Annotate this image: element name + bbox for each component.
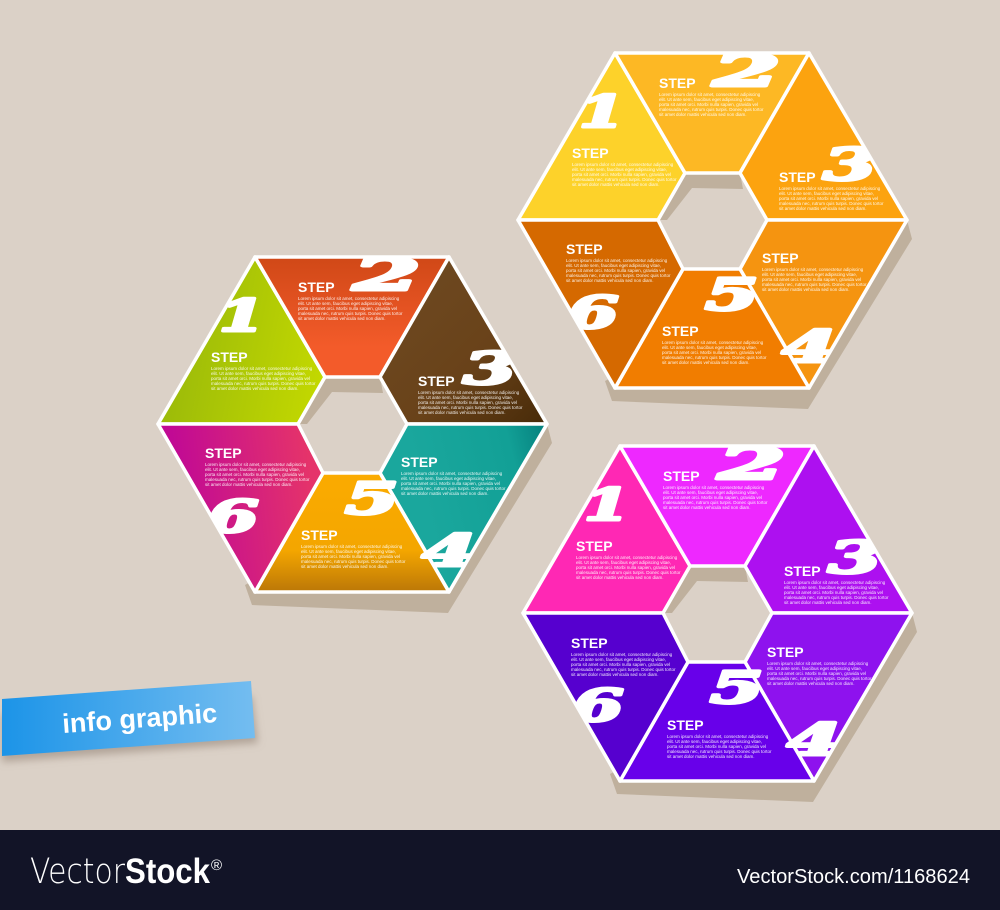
numerals: 6	[573, 681, 624, 732]
step text 2: STEP	[659, 75, 696, 91]
step text 2: STEP	[663, 468, 700, 484]
numerals: 6	[208, 492, 259, 543]
step text 3: elit. Ut ante sem, faucibus eget adipiscing vitae,	[418, 395, 513, 400]
segment 4	[380, 424, 547, 592]
step text 1: Lorem ipsum dolor sit amet, consectetur adipiscing	[211, 366, 313, 371]
step text 1: elit. Ut ante sem, faucibus eget adipiscing vitae,	[572, 167, 667, 172]
step text 3: sit amet dolor mattis vehicula sed non diam.	[779, 206, 867, 211]
step text 2	[298, 279, 403, 321]
footer bar: VectorStock.com/1168624	[737, 866, 970, 888]
segment 3	[745, 446, 912, 613]
numerals: 1	[584, 479, 630, 531]
step text 5: sit amet dolor mattis vehicula sed non diam.	[301, 564, 389, 569]
step text 6: malesuada nec, rutrum quis turpis. Donec quis tortor	[566, 273, 671, 278]
step text 1: sit amet dolor mattis vehicula sed non diam.	[576, 575, 664, 580]
step text 5: elit. Ut ante sem, faucibus eget adipiscing vitae,	[667, 739, 762, 744]
step text 3: Lorem ipsum dolor sit amet, consectetur adipiscing	[784, 580, 886, 585]
step text 6: elit. Ut ante sem, faucibus eget adipiscing vitae,	[205, 467, 300, 472]
segment 1	[158, 257, 325, 424]
step text 1	[572, 145, 677, 187]
footer bar	[0, 830, 1000, 910]
step text 3: STEP	[779, 169, 816, 185]
step text 2: Lorem ipsum dolor sit amet, consectetur adipiscing	[659, 92, 761, 97]
step text 1: porta sit amet orci. Morbi nulla sapien, gravida vel	[211, 376, 310, 381]
step text 3: Lorem ipsum dolor sit amet, consectetur adipiscing	[418, 390, 520, 395]
step text 4: porta sit amet orci. Morbi nulla sapien, gravida vel	[762, 277, 861, 282]
step text 3: porta sit amet orci. Morbi nulla sapien, gravida vel	[779, 196, 878, 201]
step text 1: STEP	[576, 538, 613, 554]
numerals: 3	[823, 139, 877, 191]
step text 4: STEP	[767, 644, 804, 660]
step text 5: Lorem ipsum dolor sit amet, consectetur adipiscing	[662, 340, 764, 345]
step text 3	[784, 563, 889, 605]
banner: info graphic	[2, 681, 258, 762]
step text 4: elit. Ut ante sem, faucibus eget adipiscing vitae,	[401, 476, 496, 481]
segment 5	[620, 662, 814, 781]
step text 4: elit. Ut ante sem, faucibus eget adipiscing vitae,	[767, 666, 862, 671]
segment 3	[740, 53, 907, 220]
step text 2: Lorem ipsum dolor sit amet, consectetur adipiscing	[298, 296, 400, 301]
segment 2	[255, 257, 449, 377]
step text 1	[211, 349, 316, 391]
step text 2	[659, 75, 764, 117]
segment 5	[255, 473, 449, 592]
step text 3: Lorem ipsum dolor sit amet, consectetur adipiscing	[779, 186, 881, 191]
step text 1: elit. Ut ante sem, faucibus eget adipiscing vitae,	[211, 371, 306, 376]
step text 1: sit amet dolor mattis vehicula sed non diam.	[572, 182, 660, 187]
numerals: 4	[422, 525, 477, 577]
numerals: 4	[782, 321, 837, 373]
step text 2: sit amet dolor mattis vehicula sed non diam.	[298, 316, 386, 321]
step text 5	[662, 323, 767, 365]
hexagon: multicolor	[158, 248, 552, 613]
step text 4: porta sit amet orci. Morbi nulla sapien, gravida vel	[767, 671, 866, 676]
step text 3: STEP	[418, 373, 455, 389]
footer bar: Vector	[30, 852, 126, 892]
step text 4: STEP	[401, 454, 438, 470]
step text 5: malesuada nec, rutrum quis turpis. Donec quis tortor	[667, 749, 772, 754]
footer bar: Stock	[125, 852, 210, 891]
footer bar: ®	[211, 857, 222, 874]
numerals: 1	[219, 290, 265, 342]
step text 1: malesuada nec, rutrum quis turpis. Donec quis tortor	[211, 381, 316, 386]
step text 6: sit amet dolor mattis vehicula sed non diam.	[205, 482, 293, 487]
step text 2: elit. Ut ante sem, faucibus eget adipiscing vitae,	[663, 490, 758, 495]
numerals: 5	[705, 269, 759, 321]
step text 2: malesuada nec, rutrum quis turpis. Donec quis tortor	[659, 107, 764, 112]
numerals	[568, 44, 877, 373]
step text 3: sit amet dolor mattis vehicula sed non diam.	[418, 410, 506, 415]
step text 6: elit. Ut ante sem, faucibus eget adipiscing vitae,	[566, 263, 661, 268]
step text 6: STEP	[566, 241, 603, 257]
numerals: 2	[712, 44, 780, 97]
step text 5: sit amet dolor mattis vehicula sed non diam.	[662, 360, 750, 365]
step text 6: Lorem ipsum dolor sit amet, consectetur adipiscing	[566, 258, 668, 263]
step text 6: sit amet dolor mattis vehicula sed non diam.	[566, 278, 654, 283]
step text 4	[401, 454, 506, 496]
step text 4: malesuada nec, rutrum quis turpis. Donec quis tortor	[401, 486, 506, 491]
step text 3: elit. Ut ante sem, faucibus eget adipiscing vitae,	[779, 191, 874, 196]
step text 4: Lorem ipsum dolor sit amet, consectetur adipiscing	[401, 471, 503, 476]
step text 2: malesuada nec, rutrum quis turpis. Donec quis tortor	[663, 500, 768, 505]
step text 1: porta sit amet orci. Morbi nulla sapien, gravida vel	[576, 565, 675, 570]
hexagon shadow	[245, 377, 552, 613]
step text 5: Lorem ipsum dolor sit amet, consectetur adipiscing	[301, 544, 403, 549]
step text 6: malesuada nec, rutrum quis turpis. Donec quis tortor	[571, 667, 676, 672]
step text 4: sit amet dolor mattis vehicula sed non diam.	[401, 491, 489, 496]
step text 4	[767, 644, 872, 686]
step text 5: porta sit amet orci. Morbi nulla sapien, gravida vel	[662, 350, 761, 355]
numerals: 3	[828, 532, 882, 584]
segment 3	[380, 257, 547, 424]
step text 5: STEP	[662, 323, 699, 339]
step text 6: elit. Ut ante sem, faucibus eget adipiscing vitae,	[571, 657, 666, 662]
step text 3: porta sit amet orci. Morbi nulla sapien, gravida vel	[418, 400, 517, 405]
segment 6	[523, 613, 688, 781]
hexagon shadow	[610, 566, 917, 802]
step text 2: porta sit amet orci. Morbi nulla sapien, gravida vel	[663, 495, 762, 500]
step text 3: sit amet dolor mattis vehicula sed non diam.	[784, 600, 872, 605]
step text 5: sit amet dolor mattis vehicula sed non diam.	[667, 754, 755, 759]
segment 1	[518, 53, 685, 220]
step text 5: porta sit amet orci. Morbi nulla sapien, gravida vel	[301, 554, 400, 559]
numerals: 4	[787, 714, 842, 766]
step text 3: malesuada nec, rutrum quis turpis. Donec quis tortor	[418, 405, 523, 410]
step text 2: sit amet dolor mattis vehicula sed non diam.	[663, 505, 751, 510]
segment 5	[615, 269, 809, 388]
step text 3: malesuada nec, rutrum quis turpis. Donec quis tortor	[779, 201, 884, 206]
step text 2: malesuada nec, rutrum quis turpis. Donec quis tortor	[298, 311, 403, 316]
segment 6	[518, 220, 683, 388]
segment 4	[745, 613, 912, 781]
step text 2	[663, 468, 768, 510]
banner: info graphic: info graphic	[61, 698, 218, 739]
numerals: 5	[710, 662, 764, 714]
step text 1: sit amet dolor mattis vehicula sed non diam.	[211, 386, 299, 391]
step text 4: Lorem ipsum dolor sit amet, consectetur adipiscing	[767, 661, 869, 666]
numerals: 3	[463, 343, 517, 395]
step text 6: porta sit amet orci. Morbi nulla sapien, gravida vel	[205, 472, 304, 477]
step text 3: malesuada nec, rutrum quis turpis. Donec quis tortor	[784, 595, 889, 600]
step text 6: porta sit amet orci. Morbi nulla sapien, gravida vel	[566, 268, 665, 273]
segment 4	[740, 220, 907, 388]
step text 4: sit amet dolor mattis vehicula sed non diam.	[762, 287, 850, 292]
step text 4	[762, 250, 867, 292]
numerals	[208, 248, 517, 577]
step text 6	[571, 635, 676, 677]
step text 2: STEP	[298, 279, 335, 295]
step text 5: porta sit amet orci. Morbi nulla sapien, gravida vel	[667, 744, 766, 749]
segment 2	[620, 446, 814, 566]
step text 4: STEP	[762, 250, 799, 266]
step text 4: malesuada nec, rutrum quis turpis. Donec quis tortor	[762, 282, 867, 287]
step text 3: elit. Ut ante sem, faucibus eget adipiscing vitae,	[784, 585, 879, 590]
segment 6	[158, 424, 323, 592]
step text 6: malesuada nec, rutrum quis turpis. Donec quis tortor	[205, 477, 310, 482]
step text 6	[566, 241, 671, 283]
step text 4: elit. Ut ante sem, faucibus eget adipiscing vitae,	[762, 272, 857, 277]
step text 5: Lorem ipsum dolor sit amet, consectetur adipiscing	[667, 734, 769, 739]
step text 5	[301, 527, 406, 569]
numerals: 6	[568, 288, 619, 339]
step text 1: Lorem ipsum dolor sit amet, consectetur adipiscing	[576, 555, 678, 560]
step text 1: STEP	[572, 145, 609, 161]
step text 6: Lorem ipsum dolor sit amet, consectetur adipiscing	[205, 462, 307, 467]
step text 2: porta sit amet orci. Morbi nulla sapien, gravida vel	[659, 102, 758, 107]
step text 1: malesuada nec, rutrum quis turpis. Donec quis tortor	[572, 177, 677, 182]
step text 1: STEP	[211, 349, 248, 365]
step text 4: Lorem ipsum dolor sit amet, consectetur adipiscing	[762, 267, 864, 272]
step text 2: sit amet dolor mattis vehicula sed non diam.	[659, 112, 747, 117]
step text 2: porta sit amet orci. Morbi nulla sapien, gravida vel	[298, 306, 397, 311]
step text 5: malesuada nec, rutrum quis turpis. Donec quis tortor	[301, 559, 406, 564]
segment 2	[615, 53, 809, 173]
step text 6: STEP	[205, 445, 242, 461]
step text 2: Lorem ipsum dolor sit amet, consectetur adipiscing	[663, 485, 765, 490]
step text 4: porta sit amet orci. Morbi nulla sapien, gravida vel	[401, 481, 500, 486]
step text 2: elit. Ut ante sem, faucibus eget adipiscing vitae,	[659, 97, 754, 102]
step text 5: STEP	[667, 717, 704, 733]
step text 5: elit. Ut ante sem, faucibus eget adipiscing vitae,	[301, 549, 396, 554]
step text 1: elit. Ut ante sem, faucibus eget adipiscing vitae,	[576, 560, 671, 565]
step text 6: Lorem ipsum dolor sit amet, consectetur adipiscing	[571, 652, 673, 657]
step text 3	[418, 373, 523, 415]
hexagon shadow	[605, 173, 912, 409]
step text 5: elit. Ut ante sem, faucibus eget adipiscing vitae,	[662, 345, 757, 350]
step text 3: porta sit amet orci. Morbi nulla sapien, gravida vel	[784, 590, 883, 595]
hexagon: purple	[523, 437, 917, 802]
step text 2: elit. Ut ante sem, faucibus eget adipiscing vitae,	[298, 301, 393, 306]
numerals: 1	[579, 86, 625, 138]
step text 3	[779, 169, 884, 211]
step text 6: STEP	[571, 635, 608, 651]
step text 1: Lorem ipsum dolor sit amet, consectetur adipiscing	[572, 162, 674, 167]
step text 5: STEP	[301, 527, 338, 543]
numerals	[573, 437, 882, 766]
step text 6: sit amet dolor mattis vehicula sed non diam.	[571, 672, 659, 677]
numerals: 5	[345, 473, 399, 525]
hexagon: orange	[518, 44, 912, 409]
numerals: 2	[717, 437, 785, 490]
step text 4: malesuada nec, rutrum quis turpis. Donec quis tortor	[767, 676, 872, 681]
step text 1: porta sit amet orci. Morbi nulla sapien, gravida vel	[572, 172, 671, 177]
step text 6: porta sit amet orci. Morbi nulla sapien, gravida vel	[571, 662, 670, 667]
numerals: 2	[352, 248, 420, 301]
segment 1	[523, 446, 690, 613]
step text 5: malesuada nec, rutrum quis turpis. Donec quis tortor	[662, 355, 767, 360]
step text 4: sit amet dolor mattis vehicula sed non diam.	[767, 681, 855, 686]
step text 6	[205, 445, 310, 487]
step text 5	[667, 717, 772, 759]
step text 3: STEP	[784, 563, 821, 579]
step text 1: malesuada nec, rutrum quis turpis. Donec quis tortor	[576, 570, 681, 575]
step text 1	[576, 538, 681, 580]
